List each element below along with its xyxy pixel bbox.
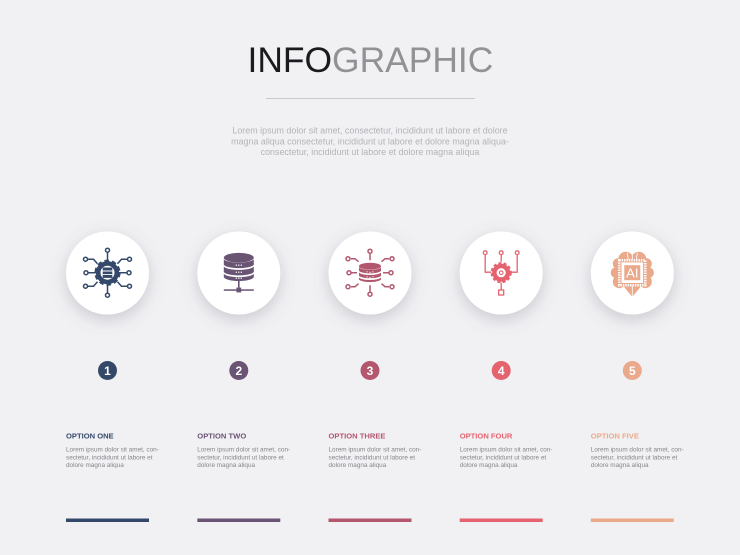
option text 2: Lorem ipsum dolor sit amet, con- (197, 446, 290, 454)
number badge 5: 5 (629, 364, 636, 378)
option text 2: sectetur, incididunt ut labore et (197, 454, 284, 462)
bar 1 (66, 518, 149, 522)
option text 4: Lorem ipsum dolor sit amet, con- (460, 446, 553, 454)
icon: AI brain: AI (626, 266, 638, 281)
option text 5: sectetur, incididunt ut labore et (591, 454, 677, 462)
number badge 1 (98, 361, 117, 380)
panel: option three (328, 232, 421, 522)
icon: AI brain (611, 252, 654, 296)
bar 3 (328, 518, 412, 522)
option text 1: sectetur, incididunt ut labore et (66, 454, 153, 462)
intro text (231, 126, 509, 157)
option text 3: dolore magna aliqua (328, 462, 387, 469)
icon: gear flow (483, 251, 519, 295)
number badge 5 (623, 361, 642, 380)
panel: option two (197, 232, 290, 522)
bar 5 (591, 518, 674, 522)
option text 3: Lorem ipsum dolor sit amet, con- (328, 446, 421, 454)
option text 4: dolore magna aliqua (460, 462, 518, 469)
option text 4 (460, 432, 553, 469)
number badge 4: 4 (498, 364, 505, 378)
intro text: consectetur, incididunt ut labore et dolore magna aliqua (261, 147, 479, 157)
number badge 1: 1 (104, 364, 111, 378)
option text 2: dolore magna aliqua (197, 462, 256, 469)
option text 5 (591, 432, 684, 469)
panel: option four (460, 232, 553, 522)
option text 4: sectetur, incididunt ut labore et (460, 454, 546, 462)
option text 1 (66, 432, 159, 469)
option text 5: Lorem ipsum dolor sit amet, con- (591, 446, 684, 454)
option text 3: sectetur, incididunt ut labore et (328, 454, 415, 462)
panel: option five (591, 232, 684, 522)
number badge 3: 3 (367, 364, 374, 378)
option text 1: Lorem ipsum dolor sit amet, con- (66, 446, 159, 454)
option text 3 (328, 432, 421, 469)
option text 4: OPTION FOUR (460, 432, 513, 440)
bar 4 (460, 518, 543, 522)
option text 2 (197, 432, 290, 469)
icon: data gear network (84, 248, 132, 297)
option text 3: OPTION THREE (328, 432, 385, 440)
number badge 2: 2 (235, 364, 242, 378)
option text 5: OPTION FIVE (591, 432, 639, 440)
option text 1: OPTION ONE (66, 432, 114, 440)
bar 2 (197, 518, 280, 522)
icon: database network (346, 249, 394, 296)
panel: option one (66, 232, 159, 522)
option text 2: OPTION TWO (197, 432, 246, 440)
number badge 2 (229, 361, 248, 380)
intro text: Lorem ipsum dolor sit amet, consectetur, incididunt ut labore et dolore (232, 126, 508, 136)
option text 1: dolore magna aliqua (66, 462, 124, 469)
intro text: magna aliqua consectetur, incididunt ut labore et dolore magna aliqua- (231, 136, 509, 146)
option text 5: dolore magna aliqua (591, 462, 649, 469)
number badge 4 (492, 361, 511, 380)
icon: database server (224, 253, 254, 292)
number badge 3 (360, 361, 380, 380)
title: INFOGRAPHIC (248, 40, 493, 80)
